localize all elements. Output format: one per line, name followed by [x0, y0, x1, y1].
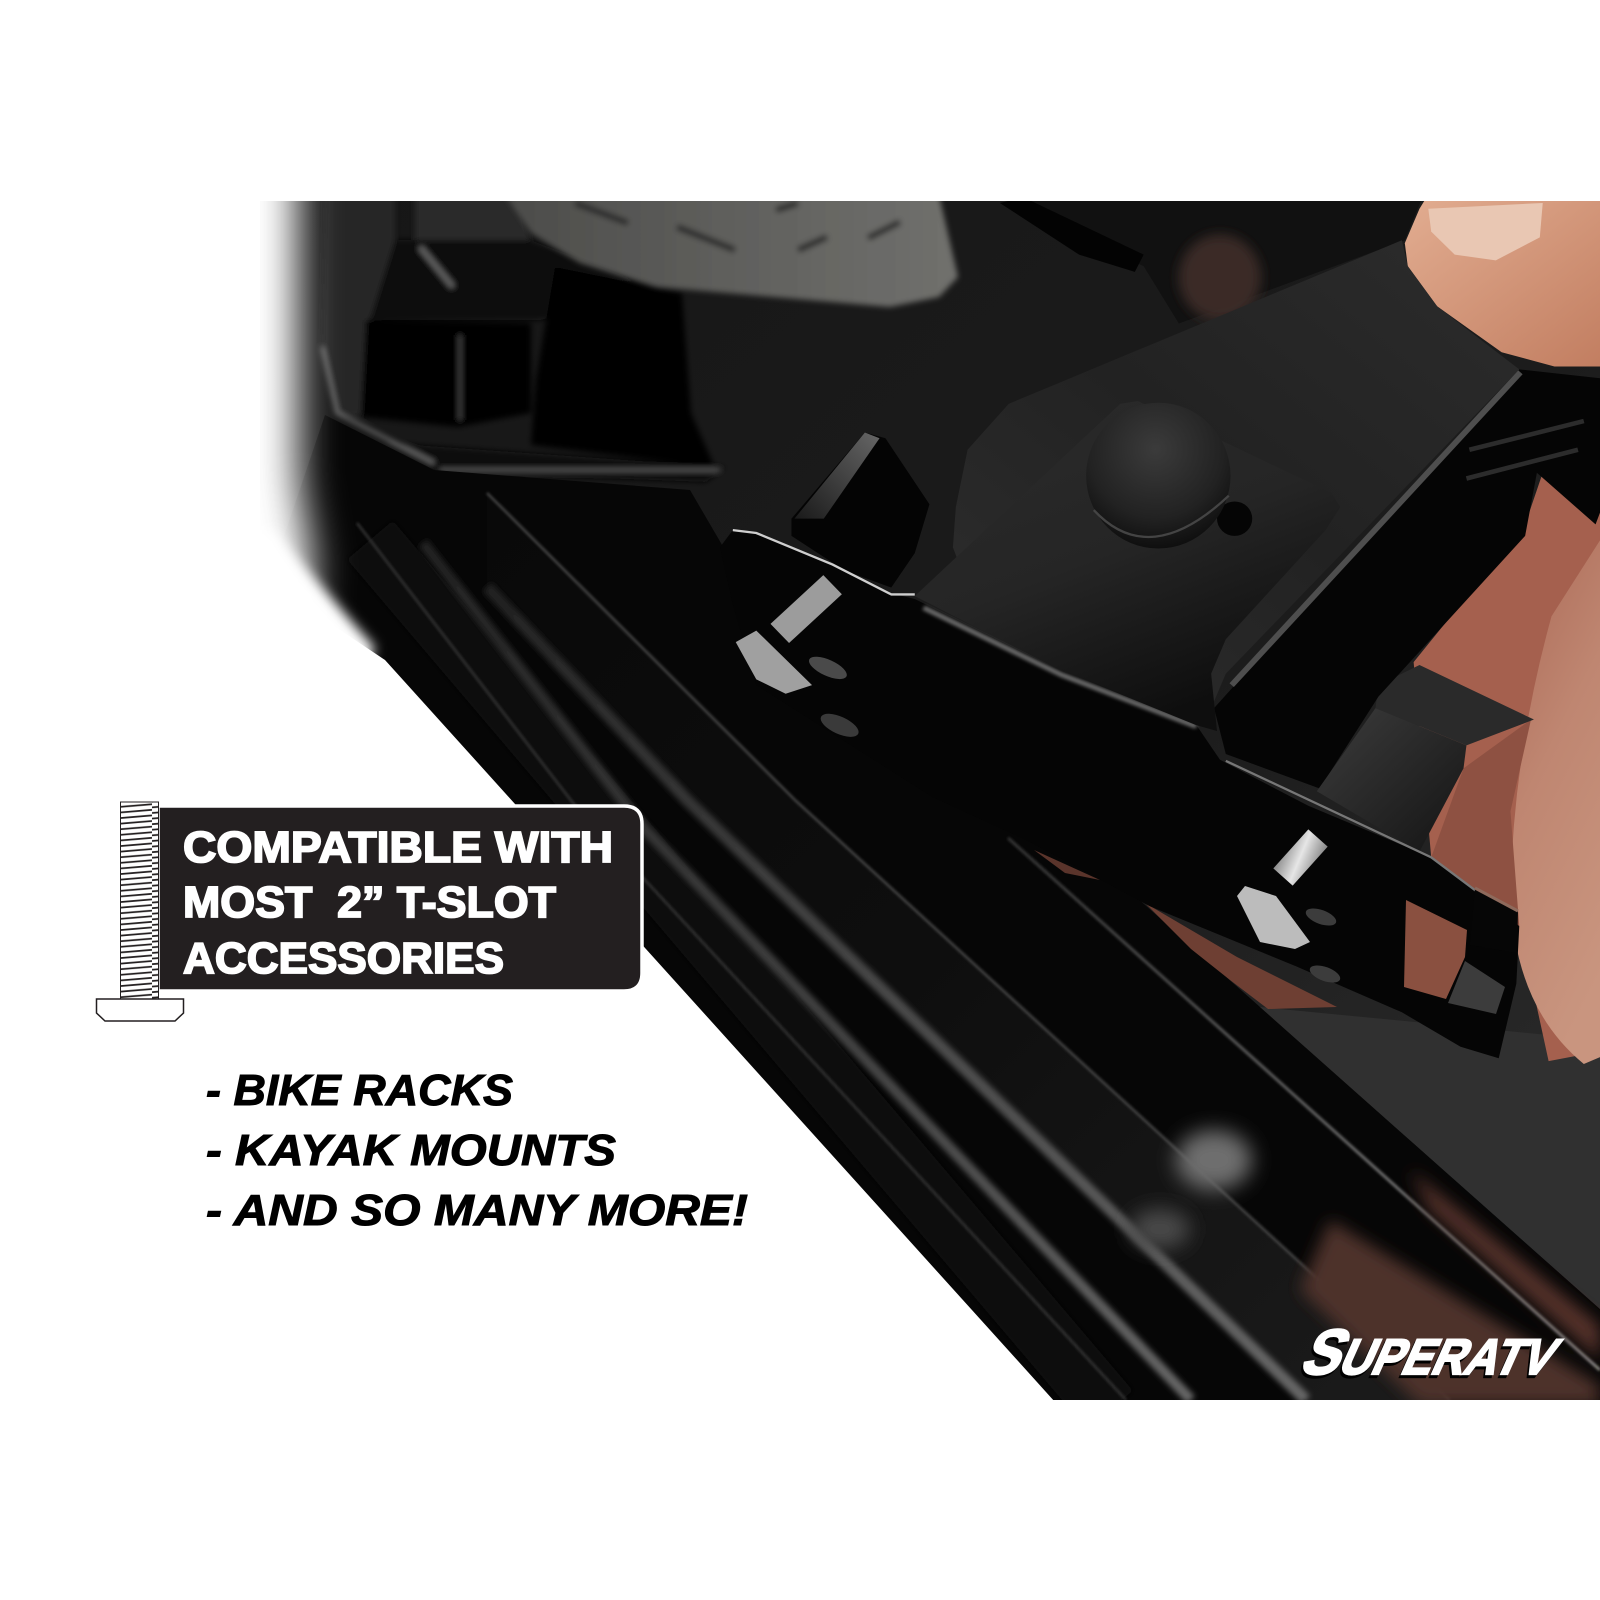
hand: fingers: [1375, 473, 1600, 1064]
panel background: [158, 806, 642, 991]
bolt thread: [120, 802, 158, 999]
logo: SuperATV: SUPERATV: [1292, 1317, 1574, 1388]
white margin above the photo: [0, 0, 1600, 201]
white margin below the photo: [0, 1400, 1600, 1600]
hand: finger band under bracket: [1034, 850, 1337, 1009]
left bolt: [736, 585, 862, 742]
hand: thumb: [1405, 197, 1600, 367]
heading text: COMPATIBLE WITH: [183, 823, 613, 872]
icon: T-slot bolt: [96, 802, 184, 1021]
accessory list: [206, 1066, 748, 1235]
accessory list: - AND SO MANY MORE!: [206, 1186, 748, 1235]
bracket assembly: [720, 197, 1600, 1058]
matte plate rim: [1232, 372, 1520, 685]
bracket gloss highlights: [733, 530, 915, 594]
accessory list: - KAYAK MOUNTS: [206, 1126, 616, 1175]
matte upper plate: [953, 240, 1519, 708]
rail glare patches: [1130, 1130, 1252, 1249]
dark mechanism under the plate: [1214, 369, 1600, 788]
blurred footrest pad: [505, 195, 958, 307]
surface, lower right: [1260, 1007, 1600, 1309]
hand: thumbnail: [1428, 203, 1543, 260]
bolt head: [96, 999, 184, 1021]
rail band holding the glare: [487, 493, 1450, 1400]
upper right seat shape: [1000, 197, 1422, 324]
photo: bracket on T-slot rail: [260, 195, 1600, 1410]
blurred footrest mount, upper left: [322, 195, 725, 482]
right stud block: [1317, 708, 1466, 852]
white fade over the left side of the photo: [0, 100, 1055, 1402]
left stud block: [792, 433, 929, 588]
accessory list: - BIKE RACKS: [206, 1066, 513, 1115]
rail face beside the white edge: [370, 540, 1110, 1410]
rail highlight lines: [357, 493, 1600, 1400]
front plate with knob: [915, 401, 1340, 731]
glossy lower bracket: [720, 530, 1519, 1058]
heading text: MOST 2” T-SLOT: [183, 878, 556, 927]
red hand reflections in the rail: [1300, 1170, 1600, 1405]
right bolt: [1237, 838, 1342, 986]
heading text: ACCESSORIES: [183, 934, 504, 983]
T-slot rail base: [280, 415, 1600, 1405]
photo background: dark glossy surface: [260, 195, 1600, 1405]
bracket tail with window: [1404, 888, 1518, 1014]
callout panel: [158, 806, 642, 991]
heading text: [183, 823, 613, 983]
